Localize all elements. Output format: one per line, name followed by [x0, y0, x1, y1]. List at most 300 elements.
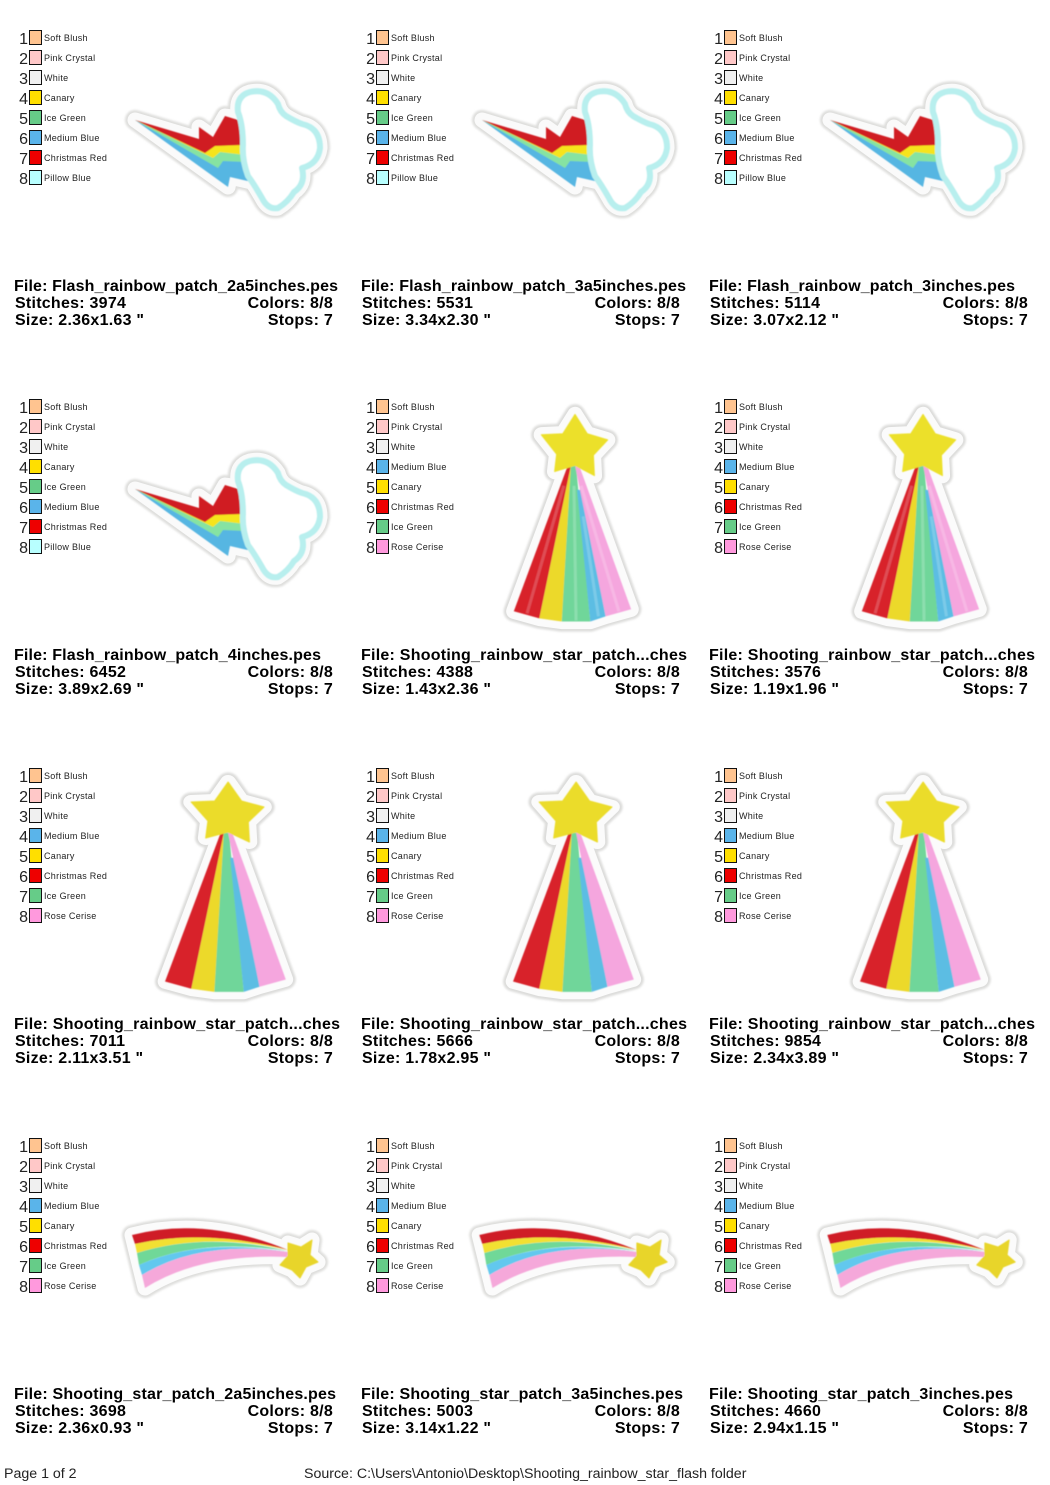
- file caption: [361, 647, 687, 698]
- color legend: 1: [19, 31, 28, 48]
- file caption: [709, 278, 1028, 329]
- color legend: Christmas Red: [739, 502, 802, 512]
- file caption: Colors: 8/8: [248, 1403, 333, 1420]
- color legend: Ice Green: [391, 1261, 433, 1271]
- color legend: 1: [366, 1139, 375, 1156]
- color legend: 6: [714, 500, 723, 517]
- file caption: Stops: 7: [615, 1420, 680, 1437]
- file caption: Size: 2.36x0.93 ": [15, 1420, 144, 1437]
- file caption: Stitches: 6452: [15, 664, 126, 681]
- file caption: Colors: 8/8: [595, 664, 680, 681]
- color legend: 2: [714, 51, 723, 68]
- color legend: 7: [366, 151, 375, 168]
- file caption: Stitches: 3698: [15, 1403, 126, 1420]
- color legend: Rose Cerise: [44, 911, 97, 921]
- color legend: Ice Green: [739, 113, 781, 123]
- file caption: Stops: 7: [963, 1050, 1028, 1067]
- color legend: 8: [366, 540, 375, 557]
- color legend: Medium Blue: [739, 133, 795, 143]
- color legend: 1: [366, 31, 375, 48]
- file caption: Size: 3.07x2.12 ": [710, 312, 839, 329]
- color legend: Pillow Blue: [391, 173, 438, 183]
- color legend: 4: [366, 1199, 375, 1216]
- color legend: Medium Blue: [739, 1201, 795, 1211]
- color legend: White: [44, 73, 68, 83]
- file caption: Stitches: 3974: [15, 295, 126, 312]
- panel: Shooting_rainbow_star_patch 1.19x1.96: [709, 400, 1035, 698]
- color legend: 3: [366, 1179, 375, 1196]
- file caption: [14, 278, 338, 329]
- color legend: 3: [366, 71, 375, 88]
- file caption: Stitches: 3576: [710, 664, 821, 681]
- color legend: White: [739, 442, 763, 452]
- patch: curved rainbow shooting star: [479, 1228, 667, 1288]
- file caption: File: Flash_rainbow_patch_3inches.pes: [709, 278, 1015, 295]
- color legend: 5: [366, 849, 375, 866]
- color legend: [714, 1138, 802, 1296]
- color legend: Soft Blush: [391, 771, 435, 781]
- color legend: [366, 1138, 454, 1296]
- color legend: [366, 30, 454, 188]
- color legend: 4: [19, 1199, 28, 1216]
- color legend: Canary: [391, 851, 422, 861]
- color legend: Medium Blue: [391, 831, 447, 841]
- color legend: 8: [714, 540, 723, 557]
- color legend: White: [391, 73, 415, 83]
- file caption: [361, 278, 686, 329]
- file caption: [709, 1386, 1028, 1437]
- color legend: 1: [19, 769, 28, 786]
- color legend: Ice Green: [44, 891, 86, 901]
- color legend: Medium Blue: [44, 133, 100, 143]
- color legend: 8: [19, 1279, 28, 1296]
- color legend: Pink Crystal: [391, 1161, 442, 1171]
- file caption: Size: 3.89x2.69 ": [15, 681, 144, 698]
- color legend: Canary: [44, 851, 75, 861]
- color legend: Canary: [739, 93, 770, 103]
- color legend: Pink Crystal: [391, 422, 442, 432]
- color legend: [366, 768, 454, 926]
- color legend: 3: [19, 809, 28, 826]
- color legend: Pink Crystal: [391, 53, 442, 63]
- color legend: Soft Blush: [739, 1141, 783, 1151]
- color legend: White: [44, 1181, 68, 1191]
- file caption: Stops: 7: [268, 312, 333, 329]
- file caption: Stitches: 4660: [710, 1403, 821, 1420]
- color legend: Canary: [739, 851, 770, 861]
- color legend: 7: [19, 1259, 28, 1276]
- color legend: 3: [714, 71, 723, 88]
- file caption: [14, 1016, 340, 1067]
- page footer: [4, 1466, 747, 1482]
- panel: Shooting_star_patch_3a5inches: [361, 1138, 683, 1437]
- color legend: Canary: [391, 1221, 422, 1231]
- file caption: Stops: 7: [615, 681, 680, 698]
- color legend: Medium Blue: [391, 133, 447, 143]
- file caption: File: Flash_rainbow_patch_3a5inches.pes: [361, 278, 686, 295]
- color legend: 2: [366, 420, 375, 437]
- file caption: Colors: 8/8: [595, 1403, 680, 1420]
- file caption: Size: 2.34x3.89 ": [710, 1050, 839, 1067]
- color legend: 3: [366, 440, 375, 457]
- color legend: 5: [19, 111, 28, 128]
- file caption: [361, 1386, 683, 1437]
- color legend: White: [44, 811, 68, 821]
- file caption: Stops: 7: [963, 1420, 1028, 1437]
- color legend: Soft Blush: [739, 33, 783, 43]
- patch: rainbow shooting star cone: [862, 414, 979, 621]
- color legend: 5: [19, 849, 28, 866]
- color legend: Soft Blush: [44, 771, 88, 781]
- color legend: 4: [366, 460, 375, 477]
- file caption: Size: 2.11x3.51 ": [15, 1050, 143, 1067]
- file caption: Size: 3.34x2.30 ": [362, 312, 491, 329]
- color legend: Ice Green: [391, 522, 433, 532]
- color legend: Rose Cerise: [391, 1281, 444, 1291]
- panel: Flash_rainbow_patch_3a5inches: [361, 30, 686, 329]
- color legend: 8: [714, 171, 723, 188]
- color legend: [19, 30, 107, 188]
- color legend: 2: [714, 420, 723, 437]
- file caption: Stitches: 7011: [15, 1033, 125, 1050]
- color legend: 6: [19, 869, 28, 886]
- file caption: Size: 1.19x1.96 ": [710, 681, 839, 698]
- patch: rainbow shooting star cone: [513, 782, 634, 992]
- file caption: Stitches: 9854: [710, 1033, 821, 1050]
- color legend: Pillow Blue: [739, 173, 786, 183]
- color legend: 6: [19, 500, 28, 517]
- file caption: Stitches: 5003: [362, 1403, 473, 1420]
- color legend: Soft Blush: [391, 402, 435, 412]
- color legend: Pink Crystal: [44, 791, 95, 801]
- color legend: 4: [366, 829, 375, 846]
- color legend: 8: [366, 909, 375, 926]
- color legend: Pillow Blue: [44, 542, 91, 552]
- file caption: Stops: 7: [615, 312, 680, 329]
- color legend: 2: [366, 789, 375, 806]
- file caption: Stops: 7: [268, 1420, 333, 1437]
- patch: rainbow flash and cloud: [135, 91, 320, 208]
- file caption: Colors: 8/8: [248, 1033, 333, 1050]
- file caption: Size: 2.94x1.15 ": [710, 1420, 839, 1437]
- color legend: 4: [366, 91, 375, 108]
- color legend: [19, 768, 107, 926]
- color legend: [714, 768, 802, 926]
- color legend: Christmas Red: [739, 153, 802, 163]
- color legend: 6: [714, 131, 723, 148]
- color legend: 1: [714, 769, 723, 786]
- color legend: 3: [366, 809, 375, 826]
- color legend: White: [739, 1181, 763, 1191]
- color legend: Pink Crystal: [739, 422, 790, 432]
- color legend: Christmas Red: [44, 1241, 107, 1251]
- color legend: 2: [19, 420, 28, 437]
- panel: Flash_rainbow_patch_4inches: [14, 400, 333, 698]
- color legend: Ice Green: [739, 1261, 781, 1271]
- panel: Shooting_rainbow_star_patch 2.11x3.51: [14, 768, 340, 1067]
- color legend: Canary: [44, 93, 75, 103]
- color legend: Rose Cerise: [44, 1281, 97, 1291]
- color legend: Soft Blush: [44, 33, 88, 43]
- color legend: Soft Blush: [44, 1141, 88, 1151]
- color legend: 4: [19, 460, 28, 477]
- color legend: 5: [366, 480, 375, 497]
- color legend: Medium Blue: [391, 1201, 447, 1211]
- file caption: File: Shooting_star_patch_3a5inches.pes: [361, 1386, 683, 1403]
- color legend: Rose Cerise: [739, 1281, 792, 1291]
- color legend: [714, 400, 802, 557]
- file caption: Size: 1.78x2.95 ": [362, 1050, 491, 1067]
- file caption: File: Shooting_rainbow_star_patch...ches: [709, 647, 1035, 664]
- color legend: Christmas Red: [391, 153, 454, 163]
- color legend: [19, 400, 107, 557]
- color legend: 3: [19, 440, 28, 457]
- color legend: 5: [714, 480, 723, 497]
- file caption: Colors: 8/8: [943, 664, 1028, 681]
- file caption: Colors: 8/8: [595, 1033, 680, 1050]
- color legend: Medium Blue: [44, 502, 100, 512]
- patch: curved rainbow shooting star: [132, 1228, 318, 1288]
- file caption: Stitches: 5531: [362, 295, 473, 312]
- file caption: Colors: 8/8: [248, 295, 333, 312]
- color legend: Christmas Red: [44, 871, 107, 881]
- color legend: Ice Green: [44, 113, 86, 123]
- panel: Shooting_rainbow_star_patch 1.78x2.95: [361, 768, 687, 1067]
- color legend: White: [739, 811, 763, 821]
- patch: rainbow flash and cloud: [135, 460, 320, 577]
- color legend: 5: [19, 480, 28, 497]
- color legend: Canary: [44, 462, 75, 472]
- color legend: Soft Blush: [44, 402, 88, 412]
- color legend: 2: [714, 789, 723, 806]
- color legend: 8: [19, 540, 28, 557]
- patch: rainbow shooting star cone: [165, 782, 286, 992]
- color legend: 5: [714, 849, 723, 866]
- color legend: Pink Crystal: [739, 1161, 790, 1171]
- file caption: Size: 3.14x1.22 ": [362, 1420, 491, 1437]
- color legend: Canary: [391, 93, 422, 103]
- panel: Flash_rainbow_patch_2a5inches: [14, 30, 338, 329]
- file caption: [14, 1386, 336, 1437]
- patch: rainbow shooting star cone: [514, 414, 631, 621]
- color legend: 7: [19, 520, 28, 537]
- color legend: 6: [366, 131, 375, 148]
- color legend: Medium Blue: [739, 831, 795, 841]
- color legend: 4: [19, 91, 28, 108]
- patch: rainbow shooting star cone: [860, 782, 981, 992]
- color legend: Christmas Red: [739, 1241, 802, 1251]
- color legend: Medium Blue: [391, 462, 447, 472]
- file caption: Stops: 7: [615, 1050, 680, 1067]
- color legend: 2: [366, 51, 375, 68]
- color legend: Ice Green: [739, 522, 781, 532]
- file caption: Stitches: 5666: [362, 1033, 473, 1050]
- color legend: 1: [19, 400, 28, 417]
- color legend: Pink Crystal: [44, 53, 95, 63]
- file caption: [361, 1016, 687, 1067]
- file caption: Stops: 7: [268, 1050, 333, 1067]
- color legend: Canary: [391, 482, 422, 492]
- color legend: 1: [366, 769, 375, 786]
- color legend: 6: [714, 869, 723, 886]
- color legend: 4: [714, 1199, 723, 1216]
- file caption: File: Shooting_star_patch_3inches.pes: [709, 1386, 1013, 1403]
- color legend: 6: [366, 500, 375, 517]
- file caption: File: Shooting_rainbow_star_patch...ches: [361, 1016, 687, 1033]
- color legend: 7: [714, 1259, 723, 1276]
- file caption: Stitches: 4388: [362, 664, 473, 681]
- color legend: Pink Crystal: [739, 791, 790, 801]
- color legend: 5: [714, 111, 723, 128]
- color legend: 3: [19, 1179, 28, 1196]
- color legend: 2: [19, 1159, 28, 1176]
- color legend: Medium Blue: [44, 831, 100, 841]
- color legend: 7: [366, 1259, 375, 1276]
- color legend: 1: [714, 400, 723, 417]
- color legend: Soft Blush: [739, 402, 783, 412]
- color legend: 1: [19, 1139, 28, 1156]
- color legend: 2: [366, 1159, 375, 1176]
- file caption: Size: 2.36x1.63 ": [15, 312, 144, 329]
- color legend: Christmas Red: [739, 871, 802, 881]
- color legend: Soft Blush: [739, 771, 783, 781]
- color legend: Rose Cerise: [391, 911, 444, 921]
- file caption: Size: 1.43x2.36 ": [362, 681, 491, 698]
- color legend: 5: [19, 1219, 28, 1236]
- color legend: 1: [714, 31, 723, 48]
- color legend: Pink Crystal: [44, 422, 95, 432]
- file caption: File: Shooting_rainbow_star_patch...ches: [361, 647, 687, 664]
- color legend: 4: [714, 460, 723, 477]
- color legend: 3: [714, 440, 723, 457]
- color legend: 4: [714, 91, 723, 108]
- file caption: [709, 1016, 1035, 1067]
- color legend: White: [391, 1181, 415, 1191]
- color legend: Pink Crystal: [391, 791, 442, 801]
- color legend: Canary: [739, 482, 770, 492]
- color legend: Ice Green: [391, 113, 433, 123]
- color legend: Ice Green: [44, 482, 86, 492]
- color legend: 2: [714, 1159, 723, 1176]
- file caption: Stops: 7: [268, 681, 333, 698]
- color legend: Pink Crystal: [739, 53, 790, 63]
- panel: Shooting_rainbow_star_patch 1.43x2.36: [361, 400, 687, 698]
- color legend: Canary: [44, 1221, 75, 1231]
- color legend: 4: [714, 829, 723, 846]
- color legend: 8: [19, 909, 28, 926]
- color legend: 1: [714, 1139, 723, 1156]
- file caption: Colors: 8/8: [248, 664, 333, 681]
- color legend: 1: [366, 400, 375, 417]
- color legend: 8: [714, 909, 723, 926]
- color legend: 3: [714, 1179, 723, 1196]
- color legend: Christmas Red: [44, 153, 107, 163]
- color legend: 8: [366, 171, 375, 188]
- file caption: File: Flash_rainbow_patch_4inches.pes: [14, 647, 321, 664]
- color legend: 5: [366, 1219, 375, 1236]
- color legend: [714, 30, 802, 188]
- panel: Shooting_star_patch_2a5inches: [14, 1138, 336, 1437]
- color legend: Rose Cerise: [739, 542, 792, 552]
- file caption: Colors: 8/8: [943, 1033, 1028, 1050]
- file caption: Stops: 7: [963, 681, 1028, 698]
- panel: Shooting_star_patch_3inches: [709, 1138, 1028, 1437]
- color legend: Ice Green: [44, 1261, 86, 1271]
- color legend: 8: [19, 171, 28, 188]
- color legend: Christmas Red: [391, 502, 454, 512]
- file caption: File: Shooting_star_patch_2a5inches.pes: [14, 1386, 336, 1403]
- color legend: 6: [366, 1239, 375, 1256]
- color legend: 7: [714, 151, 723, 168]
- color legend: Christmas Red: [391, 871, 454, 881]
- color legend: 6: [366, 869, 375, 886]
- file caption: File: Flash_rainbow_patch_2a5inches.pes: [14, 278, 338, 295]
- panel: Shooting_rainbow_star_patch 2.34x3.89: [709, 768, 1035, 1067]
- page footer: Source: C:\Users\Antonio\Desktop\Shooting_rainbow_star_flash folder: [304, 1466, 747, 1482]
- color legend: 7: [366, 520, 375, 537]
- color legend: White: [391, 811, 415, 821]
- file caption: Colors: 8/8: [943, 295, 1028, 312]
- color legend: Ice Green: [739, 891, 781, 901]
- color legend: 7: [19, 151, 28, 168]
- file caption: File: Shooting_rainbow_star_patch...ches: [14, 1016, 340, 1033]
- color legend: Ice Green: [391, 891, 433, 901]
- color legend: Soft Blush: [391, 33, 435, 43]
- file caption: Stitches: 5114: [710, 295, 820, 312]
- color legend: 3: [19, 71, 28, 88]
- file caption: Stops: 7: [963, 312, 1028, 329]
- color legend: [19, 1138, 107, 1296]
- color legend: Christmas Red: [44, 522, 107, 532]
- color legend: 2: [19, 51, 28, 68]
- color legend: 4: [19, 829, 28, 846]
- page footer: Page 1 of 2: [4, 1466, 77, 1482]
- color legend: 5: [714, 1219, 723, 1236]
- color legend: White: [391, 442, 415, 452]
- color legend: White: [739, 73, 763, 83]
- color legend: Rose Cerise: [739, 911, 792, 921]
- file caption: [14, 647, 333, 698]
- color legend: Pink Crystal: [44, 1161, 95, 1171]
- color legend: 6: [19, 1239, 28, 1256]
- file caption: File: Shooting_rainbow_star_patch...ches: [709, 1016, 1035, 1033]
- color legend: 7: [714, 520, 723, 537]
- color legend: 5: [366, 111, 375, 128]
- color legend: 7: [714, 889, 723, 906]
- color legend: White: [44, 442, 68, 452]
- color legend: 2: [19, 789, 28, 806]
- color legend: [366, 400, 454, 557]
- color legend: 6: [19, 131, 28, 148]
- file caption: [709, 647, 1035, 698]
- color legend: Medium Blue: [739, 462, 795, 472]
- file caption: Colors: 8/8: [595, 295, 680, 312]
- file caption: Colors: 8/8: [943, 1403, 1028, 1420]
- color legend: 8: [714, 1279, 723, 1296]
- color legend: 3: [714, 809, 723, 826]
- color legend: Medium Blue: [44, 1201, 100, 1211]
- panel: Flash_rainbow_patch_3inches: [709, 30, 1028, 329]
- color legend: 7: [366, 889, 375, 906]
- color legend: 8: [366, 1279, 375, 1296]
- color legend: Soft Blush: [391, 1141, 435, 1151]
- color legend: Canary: [739, 1221, 770, 1231]
- patch: curved rainbow shooting star: [827, 1228, 1015, 1288]
- patch: rainbow flash and cloud: [830, 91, 1015, 208]
- color legend: 7: [19, 889, 28, 906]
- color legend: Christmas Red: [391, 1241, 454, 1251]
- color legend: Rose Cerise: [391, 542, 444, 552]
